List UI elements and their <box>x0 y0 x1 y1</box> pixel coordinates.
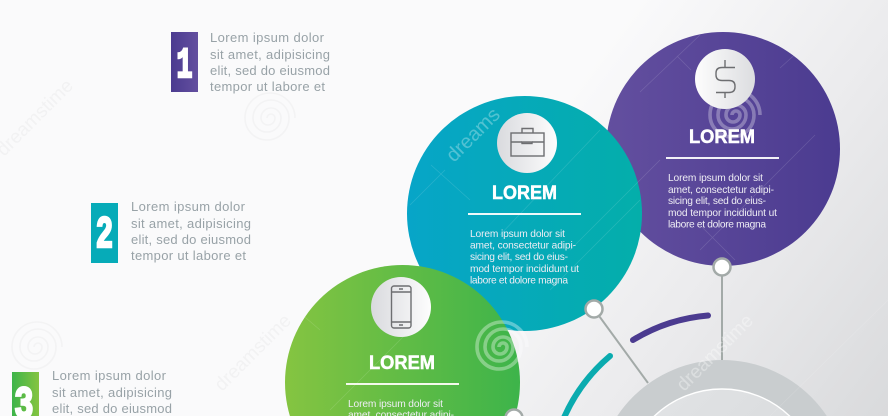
text block 2: sit amet, adipisicing <box>131 216 251 231</box>
connector: teal to hub <box>594 309 648 383</box>
panel: teal circle <box>407 96 642 331</box>
body text: labore et dolore magna <box>668 220 766 230</box>
text block 3 <box>52 368 172 416</box>
teal disc <box>407 96 642 331</box>
arc: teal <box>563 356 610 416</box>
number 1: 1 <box>176 41 192 90</box>
purple disc <box>606 32 840 266</box>
text block 2: elit, sed do eiusmod <box>131 232 251 247</box>
green disc <box>285 265 520 416</box>
body text: amet, consectetur adipi- <box>668 185 774 196</box>
rule <box>468 213 581 215</box>
rule <box>666 157 779 159</box>
connector: purple to hub <box>721 270 723 360</box>
body text: sicing elit, sed do eius- <box>470 252 568 263</box>
body text: labore et dolore magna <box>470 276 568 286</box>
watermark text: dreams <box>442 104 505 167</box>
body text: mod tempor incididunt ut <box>668 208 777 219</box>
watermark spiral <box>477 322 527 369</box>
text block 1: sit amet, adipisicing <box>210 47 330 62</box>
watermark: background text: dreamstime <box>211 311 296 396</box>
body text: sicing elit, sed do eius- <box>668 196 766 207</box>
badge 2 <box>91 203 118 263</box>
text block 3: sit amet, adipisicing <box>52 385 172 400</box>
body text: Lorem ipsum dolor sit <box>668 173 763 184</box>
panel: green circle <box>285 265 527 416</box>
watermark: hub text: dreamstime <box>673 311 758 396</box>
watermark spiral <box>710 90 760 137</box>
watermark: diagonal lines <box>285 35 888 416</box>
item 1: badge and text <box>171 30 330 94</box>
text block 2: tempor ut labore et <box>131 248 246 263</box>
body text <box>470 229 579 286</box>
text block 2: Lorem ipsum dolor <box>131 199 246 214</box>
body text: mod tempor incididunt ut <box>470 264 579 275</box>
rule <box>346 383 459 385</box>
heading: LOREM <box>369 353 435 374</box>
watermark: left spirals <box>12 93 295 369</box>
central hub <box>596 360 848 416</box>
text block 3: elit, sed do eiusmod <box>52 401 172 416</box>
heading: LOREM <box>492 183 557 204</box>
body text: Lorem ipsum dolor sit <box>348 399 443 410</box>
icon disc: dollar <box>695 49 755 109</box>
hub inner disc <box>624 389 820 416</box>
watermark: background text <box>0 76 296 396</box>
text block 3: Lorem ipsum dolor <box>52 368 167 383</box>
item 2: badge and text <box>91 199 251 263</box>
hub outer ring <box>596 360 848 416</box>
icon: phone <box>392 286 411 328</box>
item 3: badge and text <box>12 368 172 416</box>
body text: amet, consectetur adipi- <box>470 240 576 252</box>
icon: briefcase <box>511 128 544 156</box>
number 2: 2 <box>96 209 112 257</box>
icon: dollar <box>716 60 735 98</box>
node: teal connector <box>586 300 602 318</box>
text block 1: elit, sed do eiusmod <box>210 63 330 78</box>
badge 1 <box>171 32 198 92</box>
icon disc: briefcase <box>497 113 557 173</box>
heading: LOREM <box>689 127 755 148</box>
body text <box>348 399 454 416</box>
arc: purple <box>633 316 708 340</box>
badge 3 <box>12 372 39 416</box>
text block 2 <box>131 199 251 263</box>
body text <box>668 173 777 230</box>
panel: purple circle <box>606 32 840 266</box>
text block 1 <box>210 30 330 94</box>
node: green connector <box>506 410 522 416</box>
node: purple connector <box>714 258 730 276</box>
text block 1: tempor ut labore et <box>210 79 325 94</box>
icon disc: phone <box>371 277 431 337</box>
body text: Lorem ipsum dolor sit <box>470 229 565 240</box>
text block 1: Lorem ipsum dolor <box>210 30 325 45</box>
